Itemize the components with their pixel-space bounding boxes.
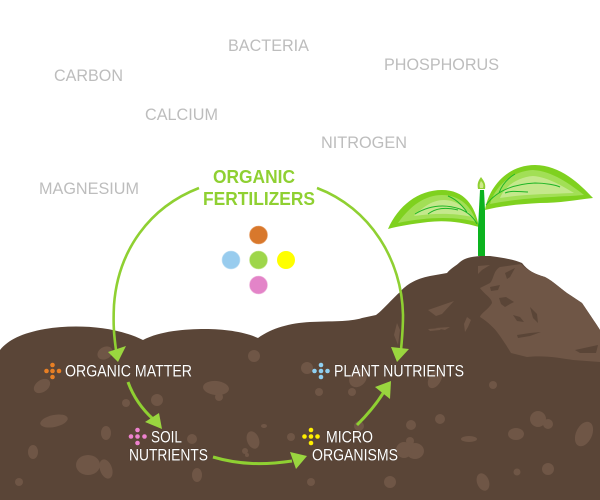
icon: pink dots xyxy=(129,428,147,445)
icon: blue dots xyxy=(312,363,330,379)
mound lit side xyxy=(480,264,600,362)
word: carbon: CARBON xyxy=(54,67,123,85)
dot: yellow xyxy=(277,251,295,269)
label: organic matter: ORGANIC MATTER xyxy=(65,362,192,380)
arrow: fertilizers to plant nutrients xyxy=(317,188,409,362)
mound shadows and flecks xyxy=(490,268,598,353)
label: micro organisms xyxy=(302,428,398,464)
dot: blue xyxy=(222,251,240,269)
dot: orange xyxy=(250,226,268,244)
label: micro organisms: ORGANISMS xyxy=(312,446,398,464)
title: ORGANIC xyxy=(213,167,295,187)
left leaf xyxy=(388,190,479,229)
word: magnesium: MAGNESIUM xyxy=(39,180,139,198)
soil ground xyxy=(0,256,600,500)
title xyxy=(203,167,315,209)
arrow: micro organisms to plant nutrients xyxy=(357,381,391,425)
label: soil nutrients xyxy=(129,428,208,464)
word: phosphorus: PHOSPHORUS xyxy=(384,56,499,74)
dot: green xyxy=(250,251,268,269)
colour dots xyxy=(222,226,295,294)
word: bacteria: BACTERIA xyxy=(228,37,309,55)
bud xyxy=(478,177,485,189)
right leaf xyxy=(485,165,593,210)
title: FERTILIZERS xyxy=(203,189,315,209)
label: soil nutrients: SOIL xyxy=(151,428,182,446)
arrow: organic matter to soil nutrients xyxy=(128,382,162,429)
label: plant nutrients: PLANT NUTRIENTS xyxy=(334,362,464,380)
floating nutrient words xyxy=(39,37,499,198)
soil pebbles xyxy=(15,344,597,493)
word: nitrogen: NITROGEN xyxy=(321,134,407,152)
label: soil nutrients: NUTRIENTS xyxy=(129,446,208,464)
word: calcium: CALCIUM xyxy=(145,106,218,124)
stem xyxy=(478,190,485,256)
arrow: fertilizers to organic matter xyxy=(108,188,199,362)
dot: pink xyxy=(250,276,268,294)
icon: yellow dots xyxy=(302,428,320,445)
label: micro organisms: MICRO xyxy=(326,428,373,446)
icon: orange dots xyxy=(44,363,61,379)
arrow: soil nutrients to micro organisms xyxy=(213,452,307,469)
seedling xyxy=(388,165,593,256)
